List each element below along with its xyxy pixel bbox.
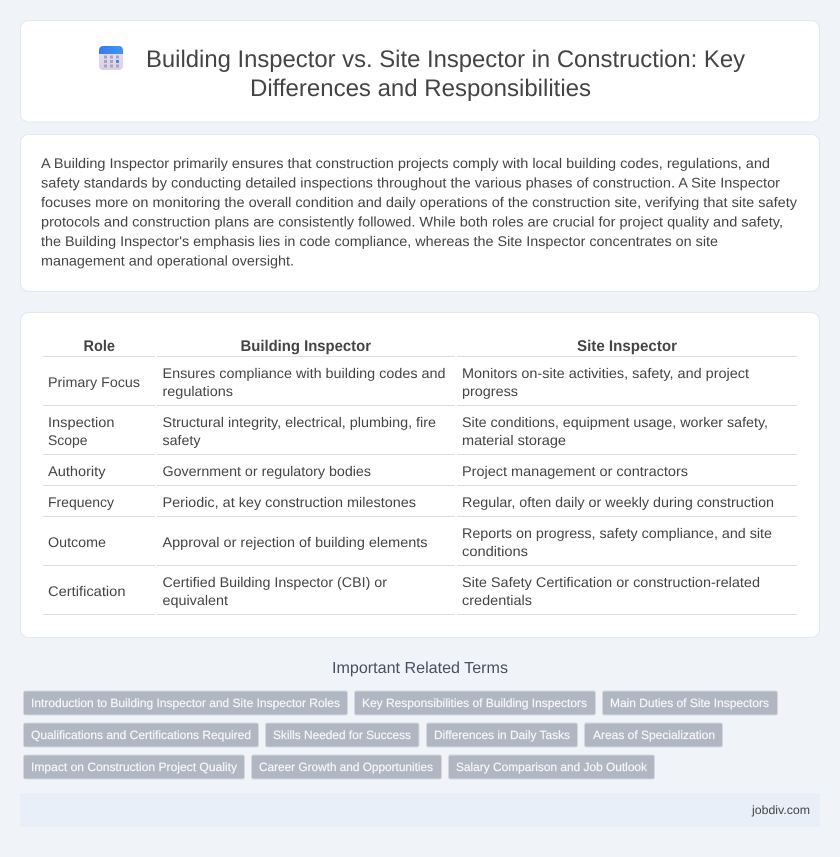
- panel: introduction: [20, 134, 820, 292]
- intro paragraph: focuses more on monitoring the overall condition and daily operations of the construction site, verifying that site safety: [41, 194, 797, 210]
- row: primary focus: Primary Focus: [48, 374, 140, 390]
- row: certification: equivalent: [162, 592, 228, 608]
- row: inspection scope: Scope: [48, 432, 88, 448]
- row: primary focus: Monitors on-site activities, safety, and project: [462, 365, 749, 381]
- tag: Salary Comparison and Job Outlook: [456, 760, 648, 774]
- row: frequency: Frequency: [48, 494, 114, 510]
- tag: Skills Needed for Success: [273, 728, 411, 742]
- title: [146, 46, 745, 102]
- row: certification: Site Safety Certification or construction-related: [462, 574, 760, 590]
- intro paragraph: A Building Inspector primarily ensures that construction projects comply with local building codes, regulations, and: [41, 155, 770, 171]
- tag: [426, 723, 578, 747]
- tag: Areas of Specialization: [593, 728, 715, 742]
- row: frequency: Regular, often daily or weekly during construction: [462, 494, 774, 510]
- title: Building Inspector vs. Site Inspector in Construction: Key: [146, 46, 745, 73]
- intro paragraph: [41, 155, 797, 268]
- tag: [602, 691, 778, 715]
- row: inspection scope: Structural integrity, electrical, plumbing, fire: [162, 414, 436, 430]
- tag: [24, 723, 258, 747]
- icon: calendar: [99, 46, 123, 70]
- table header row: Building Inspector: [240, 338, 371, 355]
- table header row: Role: [84, 338, 115, 355]
- related term tags: [24, 691, 778, 779]
- row: authority: Authority: [48, 463, 106, 479]
- tag: Introduction to Building Inspector and Site Inspector Roles: [31, 696, 340, 710]
- row: outcome: Approval or rejection of building elements: [162, 534, 428, 550]
- row: authority: Government or regulatory bodies: [162, 463, 371, 479]
- row: outcome: conditions: [462, 543, 528, 559]
- row: outcome: Outcome: [48, 534, 106, 550]
- tag: Differences in Daily Tasks: [434, 728, 570, 742]
- row: authority: [43, 463, 797, 486]
- row: certification: [43, 574, 797, 614]
- tag: Main Duties of Site Inspectors: [610, 696, 769, 710]
- row: primary focus: regulations: [162, 383, 233, 399]
- row: inspection scope: safety: [162, 432, 200, 448]
- row: primary focus: progress: [462, 383, 518, 399]
- footer source text: jobdiv.com: [751, 803, 810, 817]
- row: authority: Project management or contractors: [462, 463, 688, 479]
- row: inspection scope: material storage: [462, 432, 566, 448]
- row: primary focus: [43, 365, 797, 406]
- tag: Impact on Construction Project Quality: [31, 760, 237, 774]
- tag: [354, 691, 596, 715]
- intro paragraph: the Building Inspector's emphasis lies in code compliance, whereas the Site Inspector concentrates on site: [41, 233, 718, 249]
- row: inspection scope: Site conditions, equipment usage, worker safety,: [462, 414, 768, 430]
- row: inspection scope: [43, 414, 797, 454]
- panel: header: [20, 20, 820, 122]
- tag: [266, 723, 419, 747]
- row: outcome: Reports on progress, safety compliance, and site: [462, 525, 772, 541]
- tag: [584, 723, 722, 747]
- tag: [448, 755, 654, 779]
- intro paragraph: protocols and construction plans are consistently followed. While both roles are crucial for project quality and safety,: [41, 214, 783, 230]
- row: certification: Certification: [48, 583, 126, 599]
- tag: Key Responsibilities of Building Inspectors: [362, 696, 587, 710]
- table header row: [43, 338, 797, 356]
- panel: comparison table: [20, 312, 820, 638]
- intro paragraph: safety standards by conducting detailed inspections throughout the various phases of construction. A Site Inspector: [41, 174, 780, 190]
- tag: Qualifications and Certifications Required: [31, 728, 251, 742]
- intro paragraph: management and operational oversight.: [41, 252, 294, 268]
- row: frequency: [43, 494, 797, 516]
- footer bar: [20, 793, 820, 827]
- row: certification: credentials: [462, 592, 532, 608]
- row: primary focus: Ensures compliance with building codes and: [162, 365, 446, 381]
- tag: Career Growth and Opportunities: [259, 760, 433, 774]
- title: Differences and Responsibilities: [250, 75, 591, 102]
- row: certification: Certified Building Inspector (CBI) or: [162, 574, 387, 590]
- tag: [24, 755, 244, 779]
- row: frequency: Periodic, at key construction milestones: [162, 494, 416, 510]
- heading: important related terms: Important Related Terms: [332, 660, 508, 677]
- tag: [24, 691, 348, 715]
- row: inspection scope: Inspection: [48, 414, 114, 430]
- table header row: Site Inspector: [577, 338, 677, 355]
- tag: [252, 755, 442, 779]
- row: outcome: [43, 525, 797, 566]
